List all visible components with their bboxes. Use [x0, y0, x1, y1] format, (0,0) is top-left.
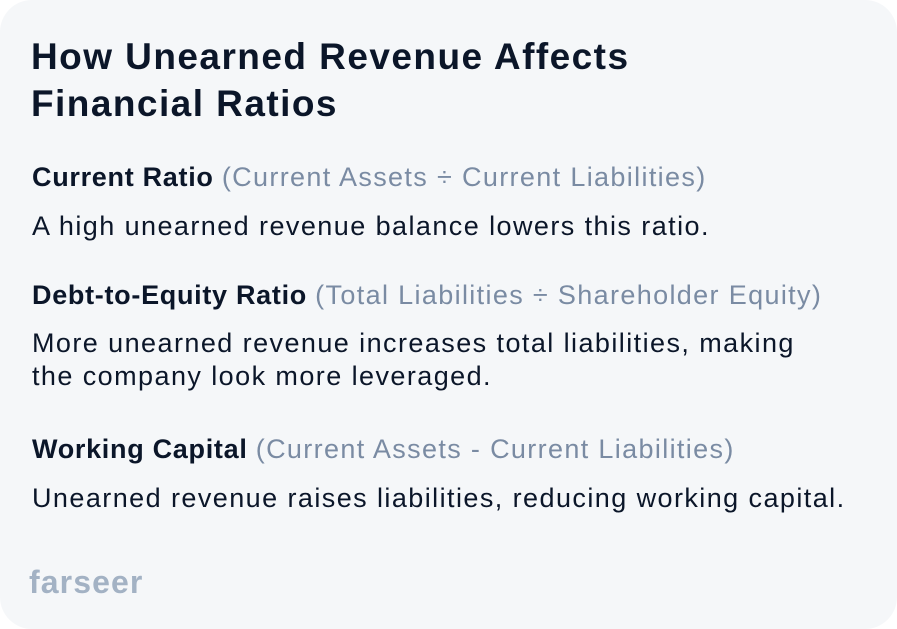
text: debt-to-equity: More unearned revenue increases total liabilities, making [32, 328, 795, 358]
text: debt-to-equity: the company look more leveraged. [32, 361, 492, 391]
logo: farseer [29, 564, 143, 600]
text: debt-to-equity [32, 328, 795, 391]
title [31, 36, 629, 124]
text: current ratio: A high unearned revenue balance lowers this ratio. [32, 211, 710, 241]
heading: working capital: Working Capital (Current Assets - Current Liabilities) [32, 434, 735, 464]
title: How Unearned Revenue Affects [31, 36, 629, 77]
text: working capital: Unearned revenue raises liabilities, reducing working capital. [32, 483, 846, 513]
heading: debt-to-equity: Debt-to-Equity Ratio (Total Liabilities ÷ Shareholder Equity) [32, 280, 822, 310]
title: Financial Ratios [31, 83, 338, 124]
heading: current ratio: Current Ratio (Current Assets ÷ Current Liabilities) [32, 162, 707, 192]
